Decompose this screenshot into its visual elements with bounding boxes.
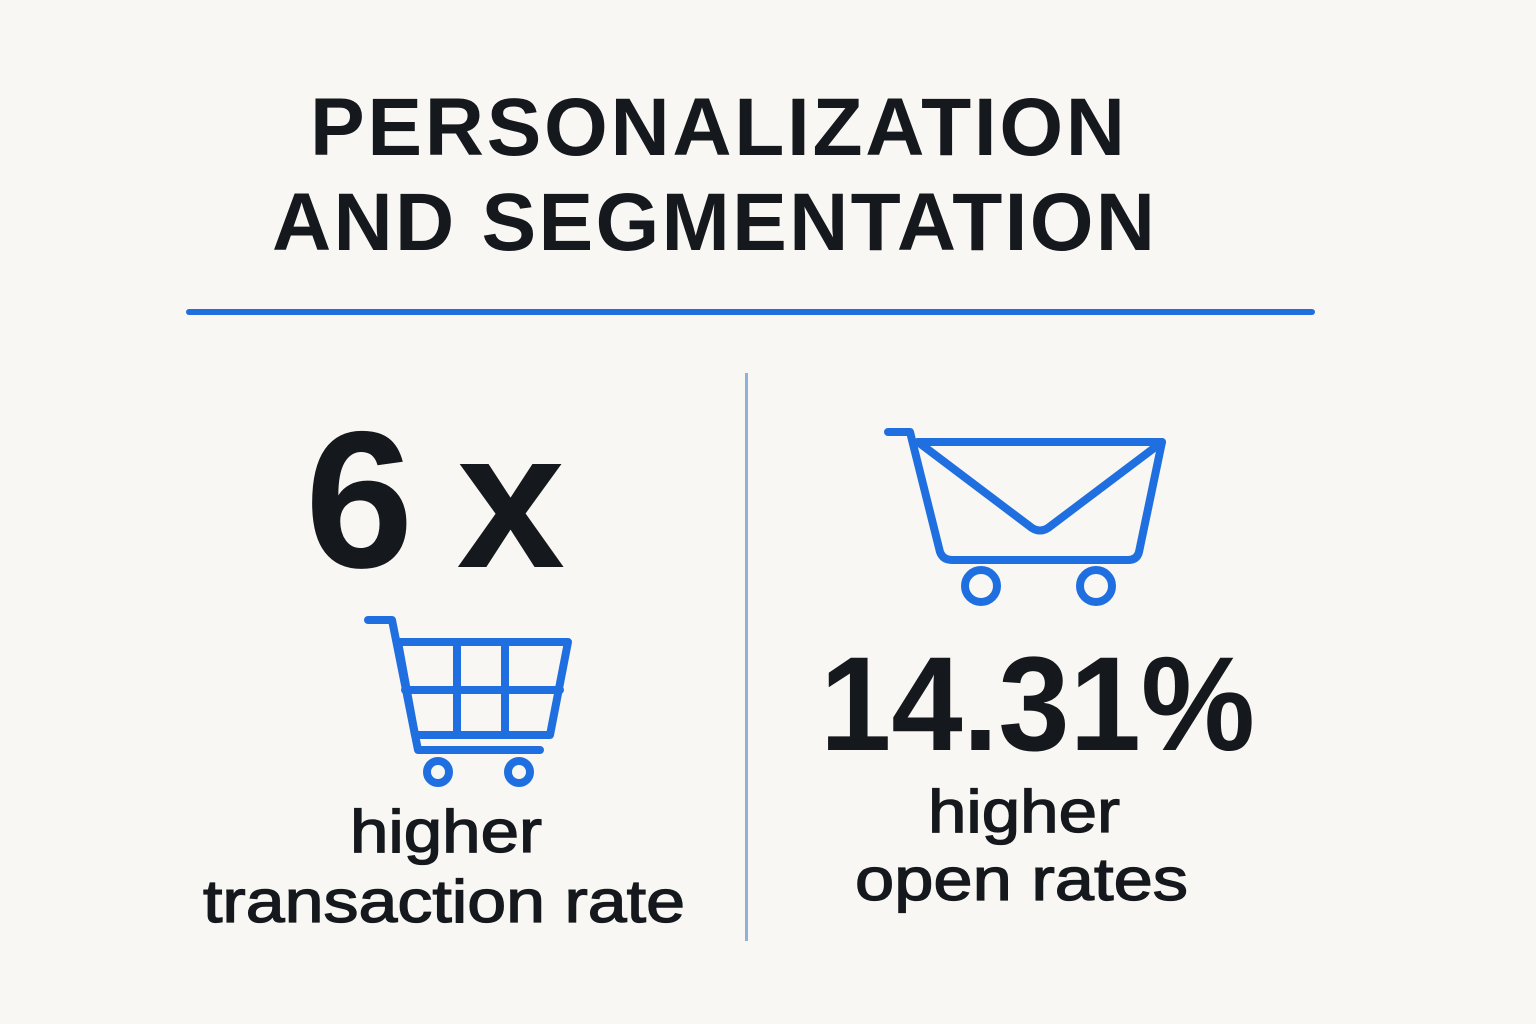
title	[272, 82, 1155, 268]
label: higher	[350, 798, 542, 865]
icon: shopping cart	[368, 620, 568, 783]
panel: open rates: open rates	[855, 846, 1188, 913]
icon: cart envelope	[888, 432, 1162, 602]
title: AND SEGMENTATION	[272, 177, 1155, 268]
title underline	[186, 309, 1315, 315]
stat: 14.31%: 14.31%	[820, 630, 1255, 779]
panel: transaction rate	[203, 391, 685, 935]
panel: transaction rate: transaction rate	[203, 868, 685, 935]
title: PERSONALIZATION	[310, 82, 1125, 173]
stat: 6x: 6x	[305, 391, 565, 609]
divider	[745, 373, 748, 941]
label: higher	[928, 778, 1120, 845]
panel: open rates	[820, 432, 1255, 913]
